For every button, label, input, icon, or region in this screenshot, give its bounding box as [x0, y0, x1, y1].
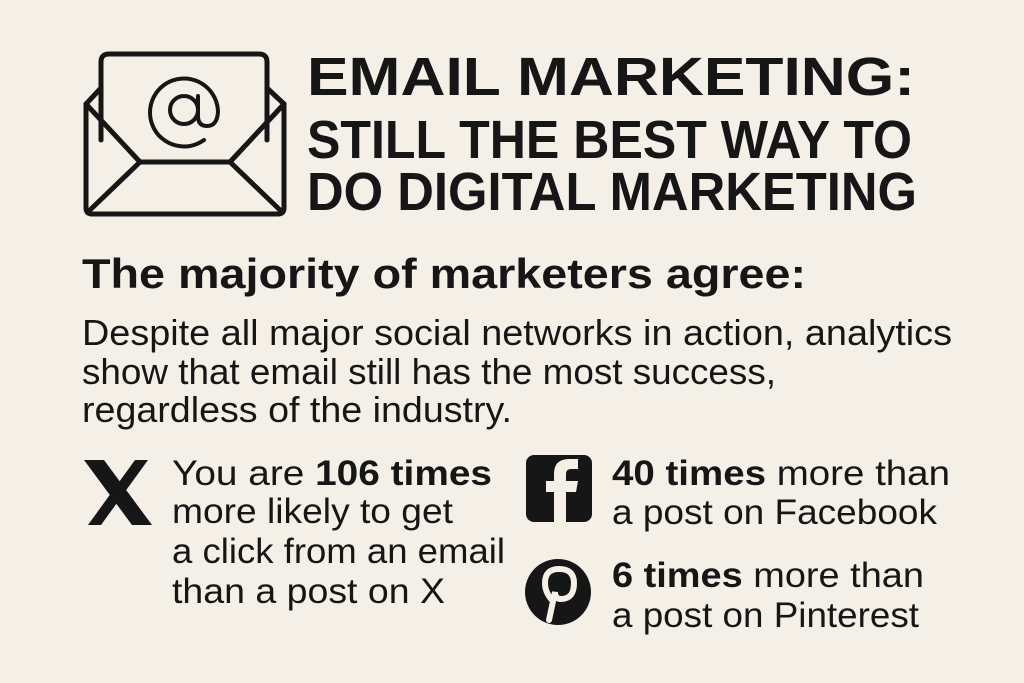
icon: pinterest [525, 559, 591, 625]
body text: show that email still has the most success, [82, 351, 776, 392]
icon: X logo [84, 460, 152, 525]
title [307, 47, 917, 222]
body text: Despite all major social networks in action, analytics [82, 312, 952, 353]
title: STILL THE BEST WAY TO [307, 110, 912, 170]
body text: regardless of the industry. [82, 389, 512, 430]
stat: pinterest: a post on Pinterest [612, 596, 919, 635]
icon: envelope with @ [86, 54, 284, 214]
stat: pinterest: 6 times more than [612, 556, 924, 595]
stat: facebook [612, 454, 950, 532]
body text [82, 312, 952, 430]
stat: X: more likely to get [172, 492, 453, 531]
icon: facebook [526, 455, 592, 522]
title: DO DIGITAL MARKETING [307, 162, 917, 222]
stat: X: a click from an email [172, 532, 505, 571]
stat: facebook: 40 times more than [612, 454, 950, 493]
stat: pinterest [612, 556, 924, 635]
stat: facebook: a post on Facebook [612, 493, 938, 532]
stat: X: than a post on X [172, 572, 445, 611]
title: EMAIL MARKETING: [307, 47, 915, 107]
stat: X [172, 454, 505, 611]
subheading: The majority of marketers agree: [82, 250, 806, 297]
stat: X: You are 106 times [172, 454, 492, 493]
